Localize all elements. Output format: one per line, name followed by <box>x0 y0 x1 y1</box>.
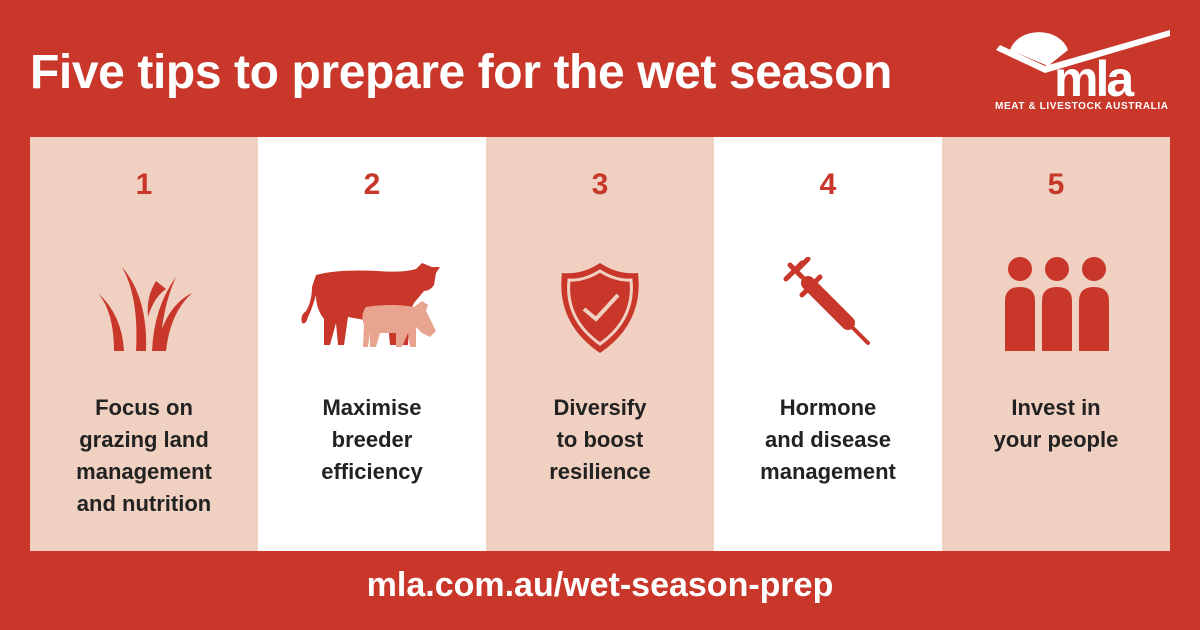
panel: tip 3: to boost <box>557 427 643 452</box>
panel: tip 3: Diversify <box>554 395 646 420</box>
panel: tip 4: management <box>760 459 896 484</box>
panel: tip 2: breeder <box>332 427 412 452</box>
panel: tip 3: 3 <box>592 168 608 201</box>
panel: tip 1: Focus on <box>95 395 193 420</box>
panel: tip 5: Invest in <box>1011 395 1101 420</box>
panel: tip 1: grazing land <box>79 427 209 452</box>
panel: tip 4: Hormone <box>780 395 876 420</box>
panel: tip 1: management <box>76 459 212 484</box>
url footer: mla.com.au/wet-season-prep <box>367 566 833 604</box>
panel: tip 3: resilience <box>549 459 651 484</box>
panel: tip 4: 4 <box>820 168 836 201</box>
panel: tip 1 <box>30 137 258 551</box>
panel: tip 5 <box>942 137 1170 551</box>
title: Five tips to prepare for the wet season <box>30 46 892 99</box>
panel: tip 1: 1 <box>136 168 152 201</box>
panel: tip 2: 2 <box>364 168 380 201</box>
panel: tip 1: and nutrition <box>77 491 211 516</box>
icon: shield <box>561 263 639 353</box>
icon: people <box>1005 257 1109 351</box>
panel: tip 3 <box>486 137 714 551</box>
panel: tip 2: Maximise <box>322 395 422 420</box>
icon: syringe <box>784 257 870 346</box>
panel: tip 5: 5 <box>1048 168 1064 201</box>
icon: cows <box>302 263 440 347</box>
panel: tip 2 <box>258 137 486 551</box>
panels <box>30 137 1170 551</box>
panel: tip 4 <box>714 137 942 551</box>
icon: grass <box>98 267 192 351</box>
logo: mla: MEAT & LIVESTOCK AUSTRALIA <box>995 101 1168 112</box>
panel: tip 5: your people <box>994 427 1118 452</box>
logo: mla: mla <box>1054 51 1135 107</box>
panel: tip 2: efficiency <box>321 459 423 484</box>
logo: mla <box>995 30 1170 112</box>
panel: tip 4: and disease <box>765 427 891 452</box>
